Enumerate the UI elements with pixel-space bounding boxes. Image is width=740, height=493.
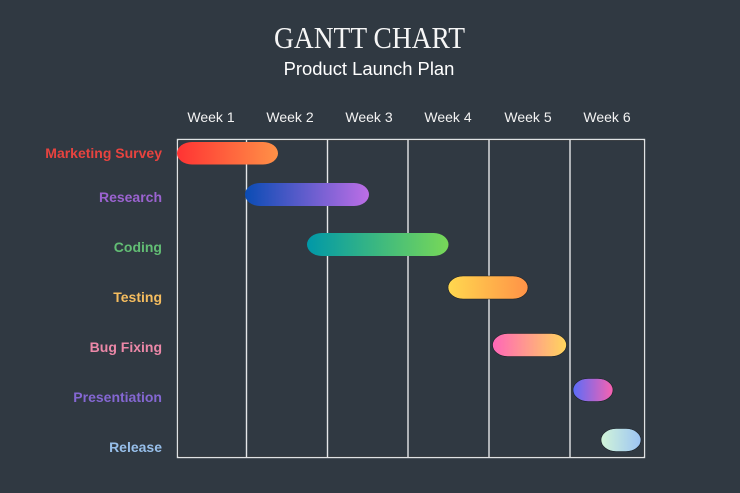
chart grid xyxy=(178,140,644,458)
week headers: Week 4 xyxy=(424,109,472,125)
week headers: Week 3 xyxy=(345,109,393,125)
week headers: Week 2 xyxy=(266,109,314,125)
task labels: Coding xyxy=(114,239,162,255)
task labels: Bug Fixing xyxy=(90,339,162,355)
task labels xyxy=(45,145,162,455)
task labels: Marketing Survey xyxy=(45,145,162,161)
task labels: Release xyxy=(109,439,162,455)
task labels: Testing xyxy=(113,289,162,305)
subtitle: Product Launch Plan xyxy=(284,58,454,79)
title: GANTT CHART xyxy=(274,20,465,55)
task bars xyxy=(177,142,641,452)
task labels: Research xyxy=(99,189,162,205)
week headers: Week 6 xyxy=(583,109,631,125)
week headers: Week 5 xyxy=(504,109,552,125)
task labels: Presentiation xyxy=(73,389,162,405)
week headers xyxy=(187,109,631,125)
week headers: Week 1 xyxy=(187,109,235,125)
